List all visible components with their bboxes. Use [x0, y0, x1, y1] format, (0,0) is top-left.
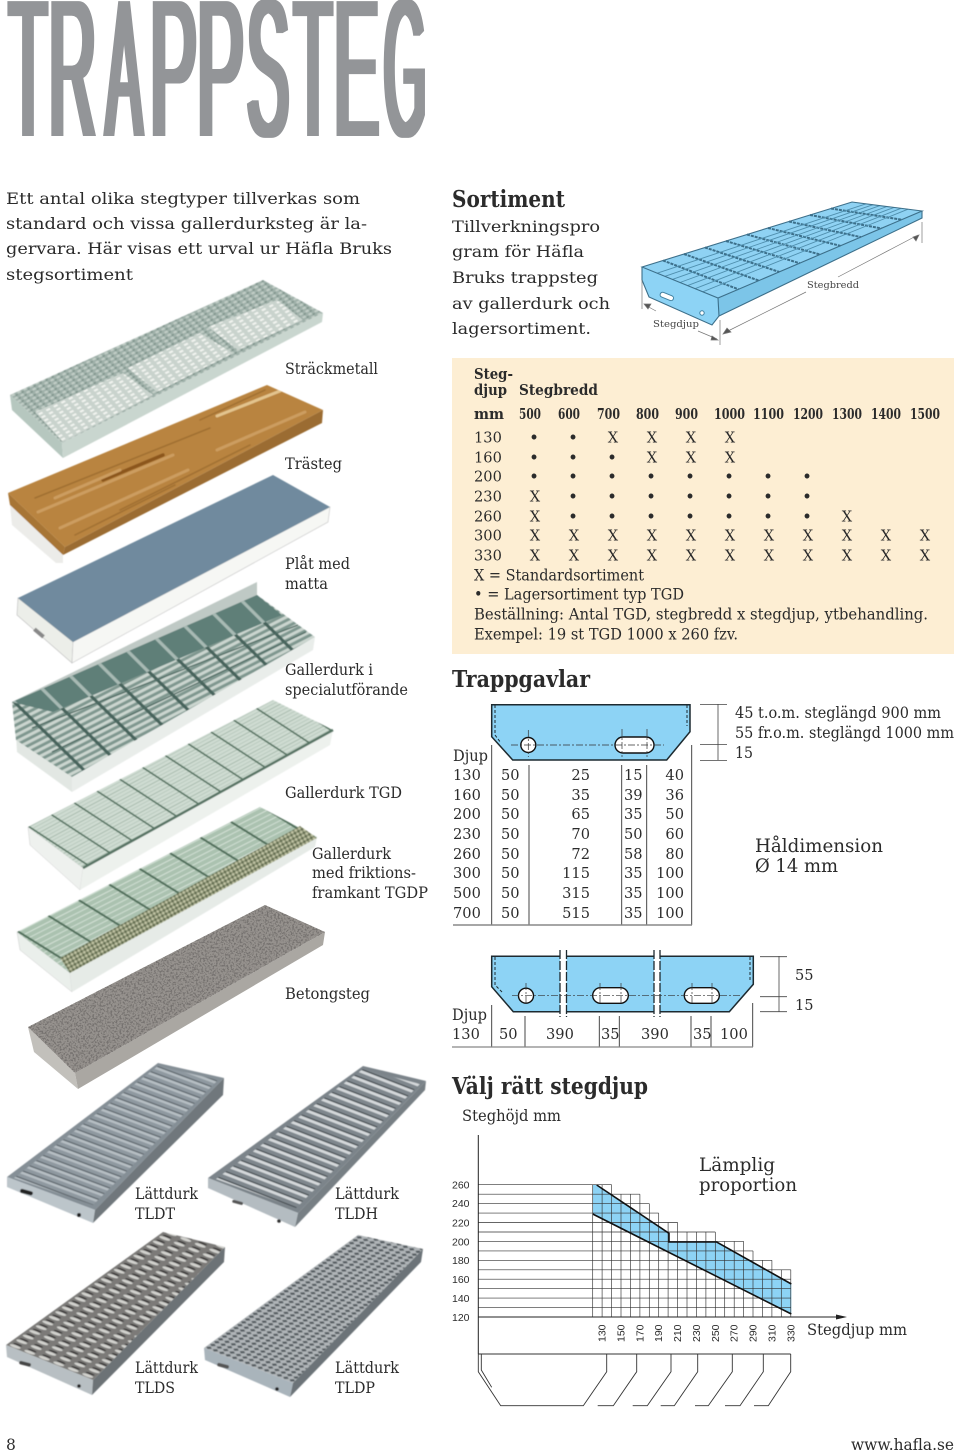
- label: Plåt med matta: matta: [285, 575, 328, 593]
- table: end plate dimensions: 260: [453, 846, 481, 863]
- chart: step depth vs riser height: [452, 1135, 847, 1406]
- table: long plate dimensions: [452, 1003, 753, 1047]
- label: Lättdurk TLDP: Lättdurk: [335, 1359, 400, 1377]
- y axis labels: 160: [452, 1274, 470, 1286]
- table notes: X = Standardsortiment: [474, 566, 645, 584]
- table notes: Exempel: 19 st TGD 1000 x 260 fzv.: [474, 626, 738, 644]
- label: Gallerdurk i specialutförande: specialutförande: [285, 681, 408, 699]
- chart annotation: Lämplig proportion: Lämplig: [699, 1155, 775, 1176]
- y axis labels: 180: [452, 1255, 470, 1267]
- table notes: [474, 566, 928, 644]
- long plate dimensions right: 55: [795, 967, 814, 984]
- title: [9, 0, 426, 178]
- label: Lättdurk TLDH: Lättdurk: [335, 1185, 400, 1203]
- x axis title: Stegdjup mm: Stegdjup mm: [807, 1321, 907, 1339]
- diagram: grating step with dimensions: [642, 202, 922, 345]
- table: end plate dimensions: Djup: [453, 747, 488, 765]
- table header: Steg-: [474, 366, 513, 383]
- diagram: stair end plate: [492, 704, 727, 760]
- x axis labels: [597, 1324, 797, 1342]
- table rows: ••: [531, 427, 576, 447]
- sortiment text: Bruks trappsteg: [452, 268, 598, 287]
- x axis labels: 330: [785, 1324, 797, 1342]
- y axis labels: 220: [452, 1218, 470, 1230]
- table: end plate dimensions: 50: [501, 846, 520, 863]
- label: Lättdurk TLDT: Lättdurk: [135, 1185, 199, 1203]
- table header: 500: [519, 406, 541, 423]
- label: Gallerdurk med friktionsframkant TGDP: framkant TGDP: [312, 884, 428, 902]
- label: Plåt med matta: Plåt med: [285, 555, 350, 573]
- sortiment text: Tillverkningspro: [452, 217, 600, 236]
- x axis labels: 130: [597, 1324, 609, 1342]
- table: end plate dimensions: 500: [453, 885, 481, 902]
- diagram: grating step with dimensions: Stegbredd: [807, 280, 859, 291]
- photo: wooden step: [8, 385, 323, 563]
- hole dimension: Håldimension: [755, 835, 883, 857]
- table: end plate dimensions: [453, 745, 692, 925]
- x axis labels: 290: [748, 1324, 760, 1342]
- table: end plate dimensions: 50: [501, 787, 520, 804]
- x axis labels: 190: [653, 1324, 665, 1342]
- table rows: X: [530, 488, 541, 506]
- photo: Lättdurk TLDT: [7, 1063, 224, 1223]
- table: long plate dimensions: 390: [546, 1026, 574, 1043]
- photo: plate step with mat: [17, 475, 330, 663]
- table: end plate dimensions: 50: [501, 767, 520, 784]
- table header: 900: [675, 406, 698, 423]
- long plate dimensions right: [795, 967, 814, 1014]
- label: Lättdurk TLDH: [335, 1185, 400, 1223]
- photo: concrete step: [28, 905, 325, 1089]
- photo: Lättdurk TLDP: [204, 1235, 423, 1397]
- photo: grating special design: [12, 582, 315, 792]
- table: end plate dimensions: 70: [571, 826, 590, 843]
- table header: mm: [474, 406, 505, 423]
- table: end plate dimensions: 100: [656, 885, 684, 902]
- photo: Lättdurk TLDH: [208, 1066, 426, 1227]
- x axis labels: 210: [672, 1324, 684, 1342]
- intro text: stegsortiment: [6, 265, 134, 284]
- table: end plate dimensions: 40: [665, 767, 684, 784]
- intro text: [6, 189, 392, 284]
- table header: 1300: [832, 406, 862, 423]
- table: end plate dimensions: 50: [501, 826, 520, 843]
- table: end plate dimensions: 50: [665, 806, 684, 823]
- label: Betongsteg: Betongsteg: [285, 985, 370, 1003]
- table: long plate dimensions: 130: [452, 1026, 480, 1043]
- label: Lättdurk TLDP: TLDP: [335, 1379, 375, 1397]
- table header: 1500: [910, 406, 940, 423]
- heading: Trappgavlar: Trappgavlar: [452, 666, 591, 693]
- chart axes: [478, 1135, 847, 1354]
- label: Gallerdurk med friktionsframkant TGDP: [312, 845, 428, 902]
- table notes: • = Lagersortiment typ TGD: [474, 586, 684, 604]
- label: Gallerdurk i specialutförande: [285, 661, 408, 699]
- y axis labels: 260: [452, 1180, 470, 1192]
- label: Lättdurk TLDT: [135, 1185, 199, 1223]
- table rows: 160: [474, 450, 502, 466]
- photo: grating TGD: [28, 700, 333, 890]
- label: Lättdurk TLDS: TLDS: [135, 1379, 175, 1397]
- table: end plate dimensions: 115: [562, 865, 590, 882]
- table rows: XXXXXXXXXXX: [530, 548, 931, 564]
- table: end plate dimensions: 60: [665, 826, 684, 843]
- table: long plate dimensions: 390: [641, 1026, 669, 1043]
- chart band outline: [593, 1185, 791, 1314]
- table header: 700: [597, 406, 620, 423]
- photo: Sträckmetall step: [10, 280, 323, 458]
- table rows: XX: [530, 508, 853, 526]
- table: end plate dimensions: 50: [501, 885, 520, 902]
- end plate text: 45 t.o.m. steglängd 900 mm: [735, 704, 941, 722]
- table: end plate dimensions: 65: [571, 806, 590, 823]
- table rows: 200: [474, 468, 502, 486]
- table: end plate dimensions: 700: [453, 905, 481, 922]
- intro text: standard och vissa gallerdurksteg är la-: [6, 214, 367, 233]
- intro text: gervara. Här visas ett urval ur Häfla Bruks: [6, 239, 392, 258]
- table: long plate dimensions: Djup: [452, 1006, 487, 1024]
- label: Gallerdurk TGD: Gallerdurk TGD: [285, 784, 402, 802]
- hole dimension: [755, 835, 883, 877]
- table: end plate dimensions: 100: [656, 905, 684, 922]
- y axis labels: 140: [452, 1293, 470, 1305]
- label: Lättdurk TLDP: [335, 1359, 400, 1397]
- table header: 1200: [793, 406, 823, 423]
- table rows: XXX: [647, 450, 736, 466]
- label: Plåt med matta: [285, 555, 350, 593]
- table rows: [474, 427, 931, 564]
- y axis labels: 240: [452, 1198, 470, 1210]
- table: end plate dimensions: 35: [571, 787, 590, 804]
- table header: 600: [558, 406, 580, 423]
- label: Gallerdurk i specialutförande: Gallerdurk i: [285, 661, 373, 679]
- table: end plate dimensions: 160: [453, 787, 481, 804]
- label: Lättdurk TLDT: TLDT: [135, 1205, 176, 1223]
- x axis labels: 310: [766, 1324, 778, 1342]
- y axis labels: 200: [452, 1236, 470, 1248]
- table notes: Beställning: Antal TGD, stegbredd x stegdjup, ytbehandling.: [474, 606, 928, 624]
- table rows: XXXX: [608, 430, 736, 446]
- heading: Välj rätt stegdjup: Välj rätt stegdjup: [451, 1073, 648, 1100]
- table: end plate dimensions: 130: [453, 767, 481, 784]
- x axis labels: 230: [691, 1324, 703, 1342]
- table: end plate dimensions: 39: [624, 787, 643, 804]
- table header: 1400: [871, 406, 901, 423]
- photo: Lättdurk TLDS: [6, 1232, 225, 1395]
- table header: Stegbredd: [519, 382, 598, 399]
- sortiment text: [452, 217, 610, 338]
- y axis labels: 120: [452, 1312, 470, 1324]
- x axis labels: 250: [710, 1324, 722, 1342]
- label: Sträckmetall: Sträckmetall: [285, 360, 378, 378]
- table rows: 330: [474, 548, 502, 564]
- x axis labels: 150: [616, 1324, 628, 1342]
- table: end plate dimensions: 50: [501, 806, 520, 823]
- long plate dimensions right: 15: [795, 997, 814, 1014]
- table: end plate dimensions: 36: [665, 787, 684, 804]
- table: end plate dimensions: 230: [453, 826, 481, 843]
- table: end plate dimensions: 58: [624, 846, 643, 863]
- chart annotation: Lämplig proportion: proportion: [699, 1175, 797, 1196]
- table: end plate dimensions: 300: [453, 865, 481, 882]
- label: Lättdurk TLDS: Lättdurk: [135, 1359, 199, 1377]
- sortiment text: av gallerdurk och: [452, 294, 610, 313]
- chart grid: [478, 1185, 791, 1317]
- table rows: •••: [531, 447, 615, 467]
- table: end plate dimensions: 200: [453, 806, 481, 823]
- label: Gallerdurk med friktionsframkant TGDP: med friktions-: [312, 864, 416, 882]
- photo: grating TGDP with friction edge: [17, 807, 317, 992]
- hole dimension: Ø 14 mm: [755, 856, 838, 877]
- table: end plate dimensions: 50: [501, 865, 520, 882]
- x axis labels: 170: [634, 1324, 646, 1342]
- label: Lättdurk TLDS: [135, 1359, 199, 1397]
- table: end plate dimensions: 315: [562, 885, 590, 902]
- panel: step size table: [452, 358, 954, 654]
- chart title: Steghöjd mm: Steghöjd mm: [462, 1107, 561, 1125]
- footer url: www.hafla.se: [851, 1436, 954, 1454]
- table rows: •••••••: [570, 506, 810, 526]
- table rows: 260: [474, 508, 502, 526]
- table: long plate dimensions: 35: [601, 1026, 620, 1043]
- page number: 8: [6, 1436, 16, 1454]
- y axis labels: [452, 1180, 470, 1324]
- table rows: ••••••••: [531, 466, 810, 486]
- table rows: XXXXXXXXXXX: [530, 528, 931, 544]
- table: end plate dimensions: 25: [571, 767, 590, 784]
- table: end plate dimensions: 50: [501, 905, 520, 922]
- diagram: long end plate: [492, 950, 787, 1018]
- table rows: 130: [474, 430, 502, 446]
- label: Gallerdurk med friktionsframkant TGDP: Gallerdurk: [312, 845, 392, 863]
- label: Lättdurk TLDH: TLDH: [335, 1205, 378, 1223]
- table header: 800: [636, 406, 659, 423]
- table: end plate dimensions: 50: [624, 826, 643, 843]
- x axis labels: 270: [729, 1324, 741, 1342]
- table: long plate dimensions: 50: [499, 1026, 518, 1043]
- label: Trästeg: Trästeg: [285, 455, 342, 473]
- table: long plate dimensions: 100: [720, 1026, 748, 1043]
- table: end plate dimensions: 515: [562, 905, 590, 922]
- table: end plate dimensions: 35: [624, 905, 643, 922]
- table rows: 300: [474, 528, 502, 544]
- table rows: 230: [474, 488, 502, 506]
- sortiment text: gram för Häfla: [452, 242, 584, 261]
- table: long plate dimensions: 35: [693, 1026, 712, 1043]
- chart annotation: Lämplig proportion: [699, 1155, 797, 1196]
- table header: 1100: [753, 406, 784, 423]
- table: end plate dimensions: 35: [624, 806, 643, 823]
- table header: [474, 366, 940, 423]
- table rows: •••••••: [570, 486, 810, 506]
- diagram: grating step with dimensions: Stegdjup: [653, 319, 699, 330]
- table header: 1000: [714, 406, 745, 423]
- end plate text: [735, 704, 954, 762]
- heading: Sortiment: Sortiment: [452, 186, 565, 213]
- table: end plate dimensions: 35: [624, 865, 643, 882]
- intro text: Ett antal olika stegtyper tillverkas som: [6, 189, 360, 208]
- sortiment text: lagersortiment.: [452, 319, 591, 338]
- table: end plate dimensions: 35: [624, 885, 643, 902]
- end plate profiles below chart: [478, 1354, 791, 1406]
- table header: djup: [474, 382, 507, 399]
- table: end plate dimensions: 100: [656, 865, 684, 882]
- end plate text: 15: [735, 744, 753, 762]
- table: end plate dimensions: 80: [665, 846, 684, 863]
- table: end plate dimensions: 15: [624, 767, 643, 784]
- table: end plate dimensions: 72: [571, 846, 590, 863]
